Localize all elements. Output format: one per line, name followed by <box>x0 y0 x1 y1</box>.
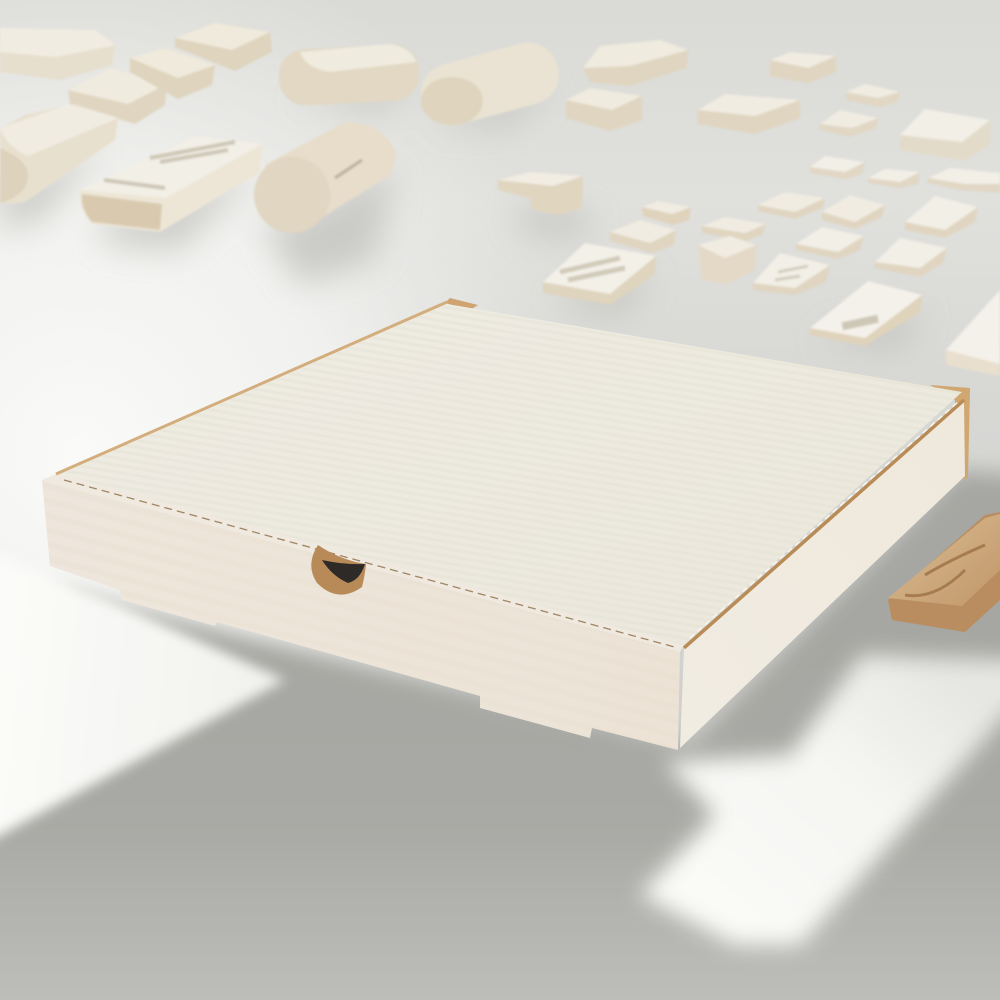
box top stripes <box>60 304 962 645</box>
object: thin tile d <box>868 169 920 188</box>
box front stripes <box>42 480 680 750</box>
object: L block <box>498 172 583 215</box>
object: small block 2 <box>130 48 215 99</box>
pizza box <box>42 298 970 750</box>
object: large printed tile right <box>810 281 922 346</box>
perforation along right fold <box>690 402 958 638</box>
object: tile row 8 <box>875 238 947 277</box>
object: thin tile c <box>810 156 865 179</box>
object: far left block <box>0 28 115 80</box>
object: thin tile e <box>928 168 1000 193</box>
object: large block right <box>900 109 990 161</box>
light patch: right <box>605 625 1000 975</box>
object: block mid right <box>698 94 800 134</box>
light patch: left <box>0 515 310 865</box>
object: small block 3 <box>175 23 272 71</box>
object: tile row 1 <box>642 201 691 225</box>
object: tile row 4 <box>905 196 978 238</box>
object: front cylinder <box>254 122 397 233</box>
tan right edge <box>684 400 964 648</box>
object: small tile b <box>820 110 878 137</box>
scattered objects <box>0 23 1000 376</box>
object: block far right <box>770 52 836 83</box>
box front side <box>42 480 680 750</box>
thumb notch <box>311 545 366 595</box>
tan back left edge <box>56 302 447 474</box>
object: labelled pack <box>80 136 262 232</box>
cardboard corner tab: back <box>445 298 478 310</box>
object: tile row 7 <box>796 227 864 259</box>
object: tile row 3 <box>822 195 885 229</box>
wooden block <box>888 512 1000 632</box>
object shadows <box>0 85 925 350</box>
object: small block 1 <box>68 68 167 124</box>
object: block center top <box>583 40 688 86</box>
box top <box>60 304 962 645</box>
object: printed tile <box>753 253 830 295</box>
notch dark inner <box>322 560 365 583</box>
object: edge tile right <box>946 290 1000 376</box>
object: tile row 5 <box>702 217 766 241</box>
object: large printed tile <box>543 243 656 305</box>
cardboard corner tab: right <box>930 385 970 480</box>
fold strip <box>42 472 684 652</box>
object: cube <box>698 236 756 284</box>
object: block small center <box>566 88 642 131</box>
object: small tile a <box>846 84 900 107</box>
floor shadow <box>0 440 1000 1000</box>
object: round cylinder top <box>414 36 566 132</box>
box right side <box>680 402 965 748</box>
object: left pack <box>0 104 118 204</box>
object: rounded bar <box>278 43 420 107</box>
perforated fold line <box>64 480 678 648</box>
object: tile row 6 <box>610 220 676 253</box>
object: tile row 2 <box>758 192 825 219</box>
